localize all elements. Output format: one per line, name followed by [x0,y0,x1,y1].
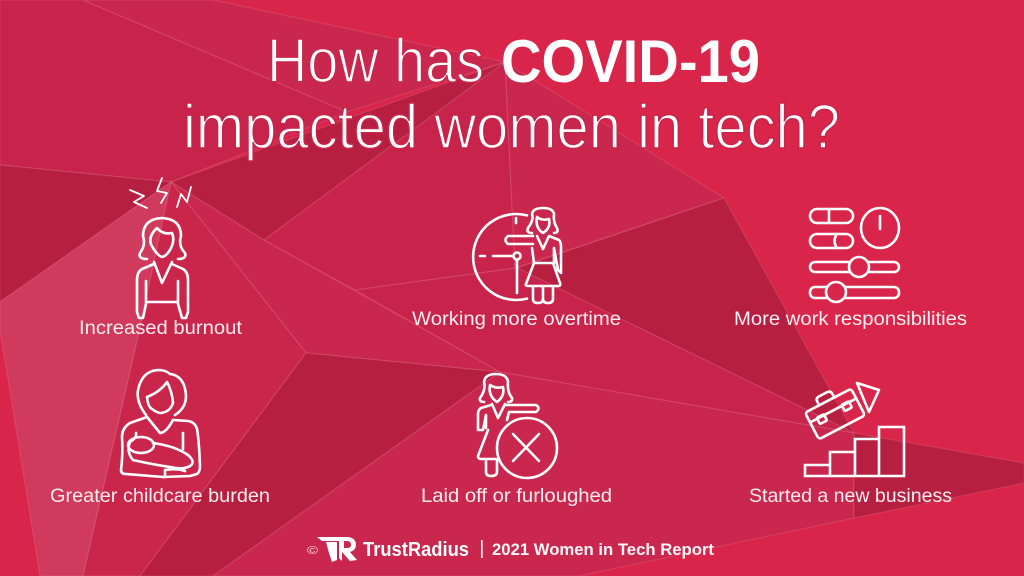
icon: sliders and dial [810,208,899,302]
divider [481,540,483,558]
label: Started a new business [749,485,952,507]
title [183,27,840,162]
title: How has [267,27,484,96]
item: increased burnout [79,178,243,339]
label: Increased burnout [79,317,243,339]
item: started a new business [749,382,952,507]
icon: briefcase, arrow and rising bars [801,382,904,476]
label: Laid off or furloughed [421,485,612,507]
label: More work responsibilities [734,308,967,330]
item: working more overtime [412,208,621,330]
icon: woman with x circle [478,374,557,478]
item: greater childcare burden [50,370,270,507]
icon: woman holding baby [121,370,200,477]
title: impacted women in tech? [183,93,840,162]
copyright mark: © [307,545,318,557]
item: more work responsibilities [734,208,967,330]
label: Greater childcare burden [50,485,270,507]
label: Working more overtime [412,308,621,330]
icon: woman with clock [473,208,561,303]
logo mark [317,537,357,562]
item: laid off or furloughed [421,374,612,507]
footer [307,537,714,562]
logo wordmark: TrustRadius [363,539,469,561]
icon: stressed woman [130,178,191,318]
report name: 2021 Women in Tech Report [492,541,714,559]
title: COVID-19 [501,28,760,95]
